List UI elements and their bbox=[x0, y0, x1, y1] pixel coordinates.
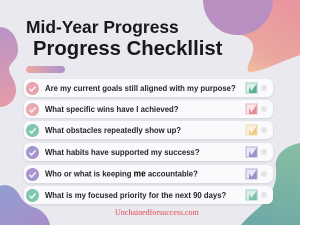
status dot bbox=[261, 127, 267, 133]
icon: check circle bbox=[26, 124, 39, 137]
icon: check circle bbox=[26, 189, 39, 202]
icon: checkbox bbox=[246, 146, 258, 158]
question text: Are my current goals still aligned with my purpose? bbox=[44, 83, 235, 93]
icon: checkbox bbox=[246, 124, 258, 136]
title line 1: Mid-Year Progress bbox=[26, 17, 179, 37]
icon: checkbox bbox=[246, 82, 258, 94]
status dot bbox=[261, 106, 267, 112]
checklist row 4 bbox=[24, 143, 273, 161]
question text: What obstacles repeatedly show up? bbox=[44, 125, 181, 135]
question text: What specific wins have I achieved? bbox=[44, 104, 178, 114]
icon: check circle bbox=[26, 168, 39, 181]
icon: checkbox bbox=[246, 168, 258, 180]
icon: check circle bbox=[26, 82, 39, 95]
icon: checkbox bbox=[246, 104, 258, 114]
checklist row 2 bbox=[24, 100, 273, 118]
icon: checkbox bbox=[246, 190, 258, 200]
footer website credit: Unchainedforsuccess.com bbox=[115, 208, 199, 217]
question text: What habits have supported my success? bbox=[44, 147, 199, 157]
checklist row 1 bbox=[24, 79, 273, 97]
status dot bbox=[261, 85, 267, 91]
checklist row 6 bbox=[24, 186, 273, 204]
title line 2: Progress Checkllist bbox=[33, 38, 222, 60]
status dot bbox=[261, 171, 267, 177]
question text: Who or what is keeping me accountable? bbox=[44, 168, 197, 178]
icon: check circle bbox=[26, 103, 39, 116]
status dot bbox=[261, 149, 267, 155]
icon: check circle bbox=[26, 146, 39, 159]
accent pill bbox=[26, 66, 65, 73]
question text: What is my focused priority for the next 90 days? bbox=[44, 190, 226, 200]
checklist row 5 bbox=[24, 165, 273, 183]
status dot bbox=[261, 192, 267, 198]
checklist row 3 bbox=[24, 121, 273, 139]
